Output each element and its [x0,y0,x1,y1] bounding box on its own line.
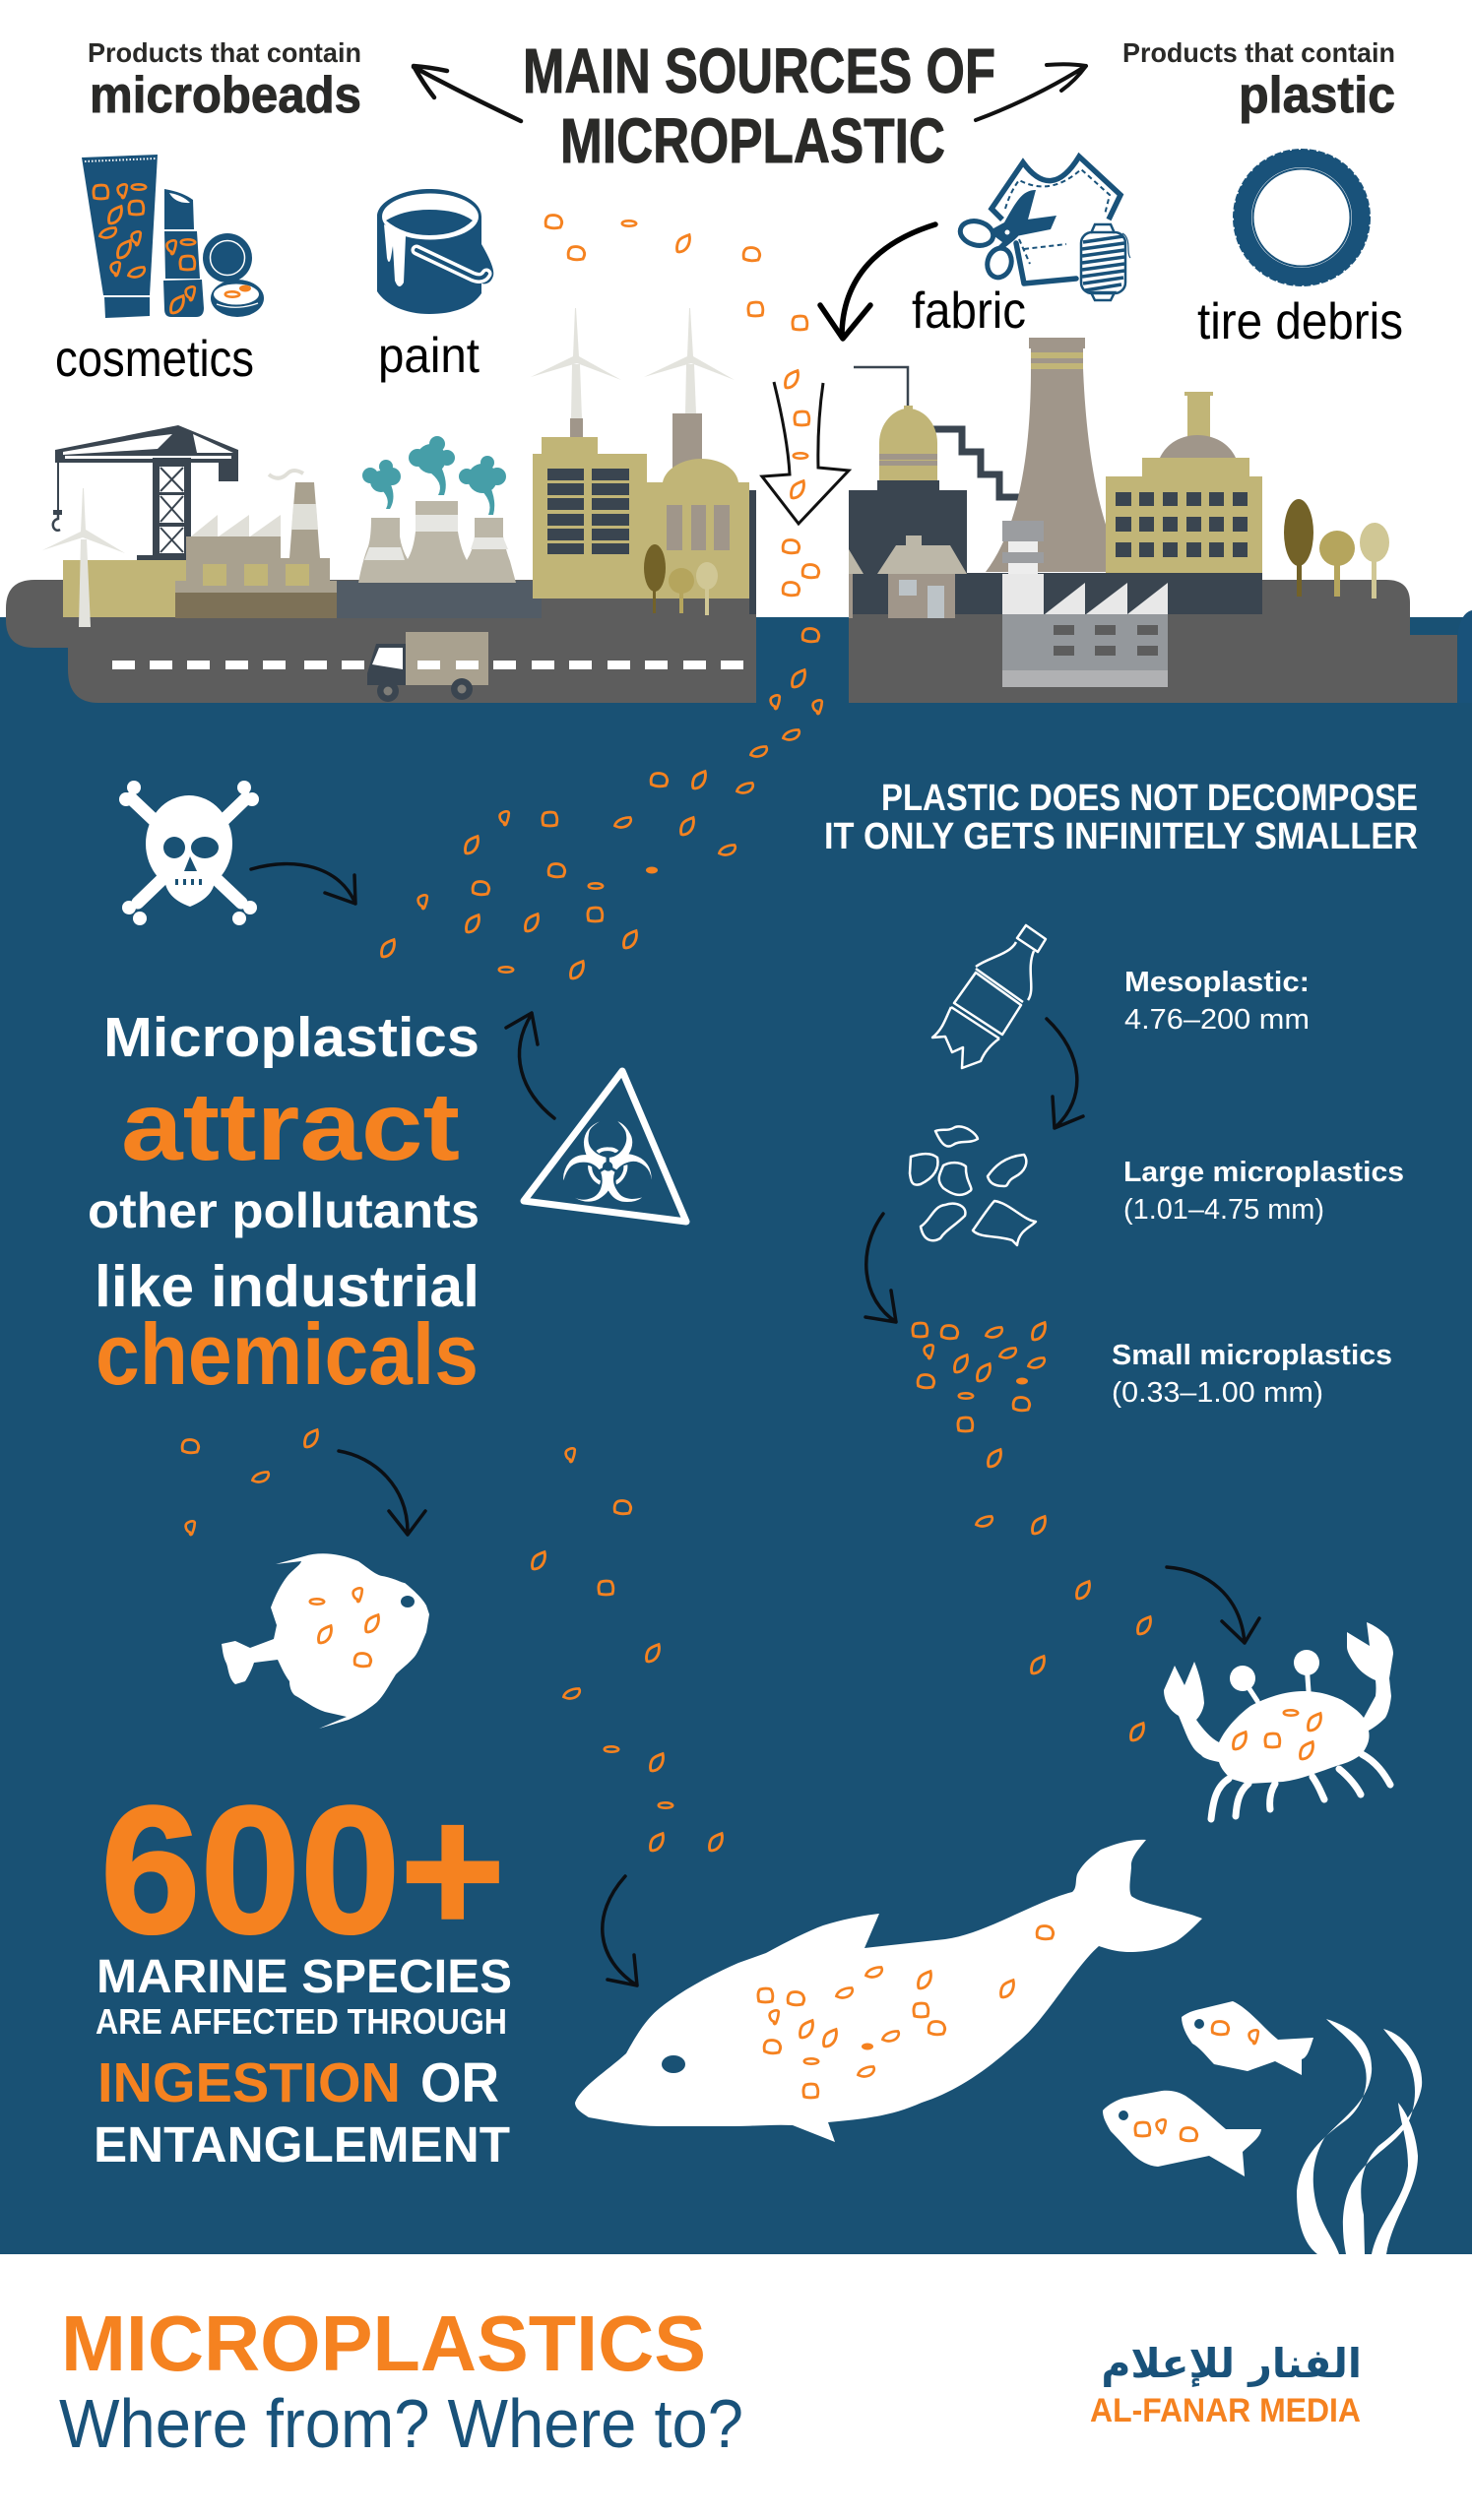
land: right [849,580,1457,703]
heading: products that contain plastic: Products that contain [1122,37,1395,68]
dark band [967,573,1262,614]
icon: tire [1234,150,1370,285]
wind turbine: right tall [644,308,735,413]
particles: left of fish [182,1430,317,1535]
label: tire debris: tire debris [1197,293,1403,350]
label: paint: paint [378,328,480,383]
factory: beige [175,471,337,618]
land: left [6,580,756,703]
text block: marine species: MARINE SPECIES [96,1951,512,2003]
arrow: to plastic [976,64,1086,120]
label: mesoplastic: Mesoplastic: [1124,967,1310,998]
arrow: particles to fish [339,1451,425,1535]
text block: microplastics attract: Microplastics [103,1006,480,1069]
arrow: to microbeads [414,66,521,121]
particles: central stream [533,1448,722,1851]
label: mesoplastic [1124,967,1310,1036]
text block: microplastics attract: other pollutants [88,1183,480,1238]
icon: broken bottle [932,925,1046,1068]
hollow arrow into water [762,382,849,524]
domed tank [879,406,937,480]
wind turbine: left tall [531,308,621,418]
heading: products that contain microbeads: microbeads [90,67,361,124]
building with chimneys and dome [533,413,756,614]
power plant with cooling towers [337,501,542,618]
logo: Al-Fanar Media: الفنار للإعلام [1101,2340,1362,2388]
heading: products that contain plastic [1122,37,1395,124]
particles: falling from air into ocean [545,216,822,792]
text block: microplastics attract: like industrial [95,1254,480,1319]
refinery wire [854,367,908,406]
particles: cluster near skull [382,772,736,978]
text block: marine species [94,1951,512,2173]
icon: small fish upper [1182,2001,1313,2075]
ocean background [0,617,1472,2254]
logo: Al-Fanar Media [1090,2340,1362,2429]
icon: paint bucket [377,189,493,314]
footer background [0,2254,1472,2520]
icon: biohazard triangle [524,1071,686,1228]
ocean edge bump [1458,610,1472,703]
icon: biohazard triangle: ☣ [558,1101,657,1228]
arrow: particles to dolphin [603,1876,637,1985]
label: mesoplastic: 4.76–200 mm [1124,1004,1310,1036]
house [849,536,967,618]
icon: fabric, scissors and thread [957,157,1130,300]
footer title: Where from? Where to? [59,2385,743,2462]
text block: marine species: ARE AFFECTED THROUGH [96,2001,507,2042]
dark building [849,480,967,614]
title [523,35,995,176]
stair pipe [933,429,1023,497]
icon: dolphin [575,1840,1202,2142]
title: MICROPLASTIC [560,105,945,176]
arrow: fabric to water [820,224,935,339]
text block: marine species: ENTANGLEMENT [94,2116,510,2173]
logo: Al-Fanar Media: AL-FANAR MEDIA [1090,2392,1361,2429]
label: small microplastics: (0.33–1.00 mm) [1112,1377,1323,1409]
text block: marine species: OR [420,2051,499,2114]
text block: microplastics attract: attract [121,1072,460,1180]
text block: microplastics attract: chemicals [96,1305,479,1403]
icon: small fish lower [1103,2091,1261,2176]
text block: microplastics attract [88,1006,480,1403]
trees: left group [644,544,718,615]
smoke clouds [362,436,506,515]
arrow: bottle to fragments [1047,1019,1083,1128]
stat: 600+: 600+ [100,1768,505,1971]
label: fabric: fabric [912,283,1026,340]
truck [367,632,488,702]
road markings [112,661,743,669]
label: cosmetics: cosmetics [55,331,254,388]
heading: products that contain plastic: plastic [1239,67,1395,124]
icon: cosmetics [82,155,264,318]
crane [53,425,238,560]
heading: products that contain microbeads: Products that contain [88,37,361,68]
label: large microplastics: Large microplastics [1123,1157,1404,1188]
footer title [59,2300,743,2462]
icon: crab [1164,1622,1393,1819]
footer title: MICROPLASTICS [61,2300,706,2387]
label: large microplastics: (1.01–4.75 mm) [1123,1194,1324,1226]
big chimney tower [986,338,1128,572]
heading: plastic does not decompose: IT ONLY GETS INFINITELY SMALLER [824,816,1418,857]
arrow: biohazard to particles [506,1013,554,1118]
particles: near crab [976,1450,1150,1740]
icon: skull and crossbones [119,781,259,925]
label: small microplastics: Small microplastics [1112,1340,1392,1371]
icon: large fish [222,1553,429,1729]
text block: marine species: INGESTION [97,2051,401,2114]
building: khaki block [63,560,186,617]
arrow: particles to crab [1167,1567,1259,1643]
trees: right group [1284,499,1389,598]
particles: small microplastics [913,1323,1045,1431]
heading: products that contain microbeads [88,37,361,124]
building: right with dome [1106,392,1262,573]
arrow: skull to particles [251,864,355,904]
title: MAIN SOURCES OF [523,35,995,106]
heading: plastic does not decompose [824,778,1418,857]
grey tower and factory [1002,521,1168,687]
icon: seaweed [1297,2019,1422,2254]
wind turbine: small [42,488,125,627]
label: large microplastics [1123,1157,1404,1226]
label: small microplastics [1112,1340,1392,1409]
icon: large plastic fragments [910,1126,1036,1245]
arrow: large to small fragments [865,1214,896,1322]
